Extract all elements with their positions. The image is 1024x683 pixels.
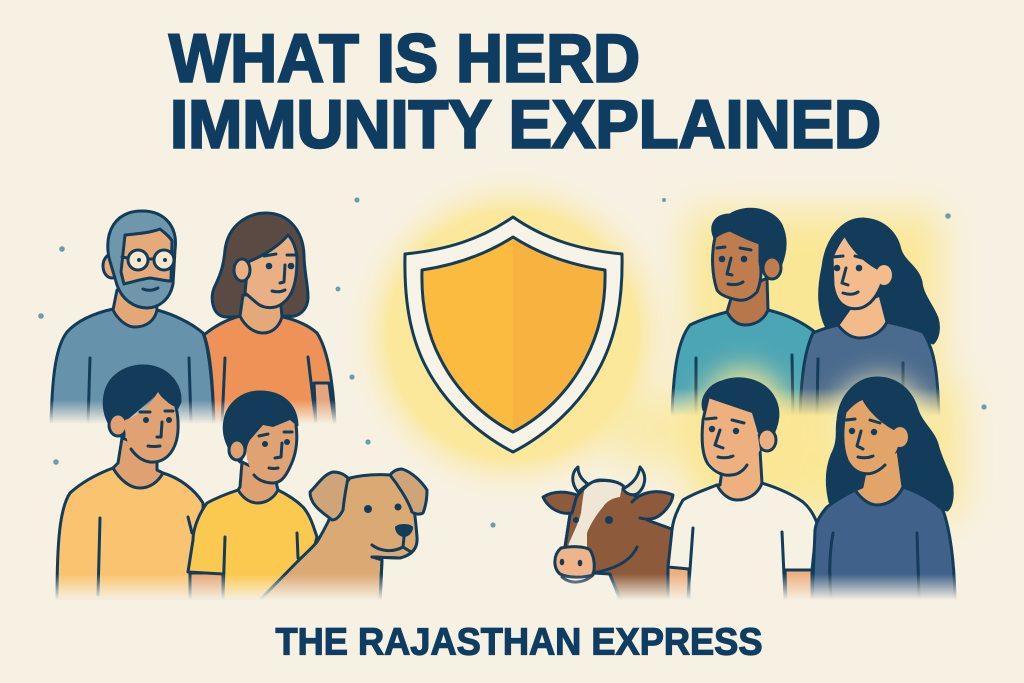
person: woman in orange shirt [204,213,335,428]
front right group [543,378,956,605]
icon: dog [255,469,427,605]
person: woman in dark blue shirt [812,378,956,605]
person: older man with beard and glasses [51,211,214,428]
glow around front right people [696,368,930,492]
person: boy in yellow shirt [188,392,317,600]
title: IMMUNITY EXPLAINED [170,86,881,162]
title [169,20,881,162]
footer: publisher name: THE RAJASTHAN EXPRESS [276,622,762,664]
back left group [51,211,335,428]
back right group [672,209,939,420]
decorative dots [38,197,987,528]
shield icon [405,217,622,452]
person: boy in orange-yellow shirt [57,366,205,600]
person: woman in blue shirt [800,219,939,420]
title: WHAT IS HERD [169,20,640,96]
icon: cow [543,467,680,605]
glow behind shield [341,163,685,507]
person: man in teal shirt [672,209,820,420]
person: man in white shirt [668,379,817,605]
front left group [57,366,427,605]
glow behind protected people [610,212,962,515]
